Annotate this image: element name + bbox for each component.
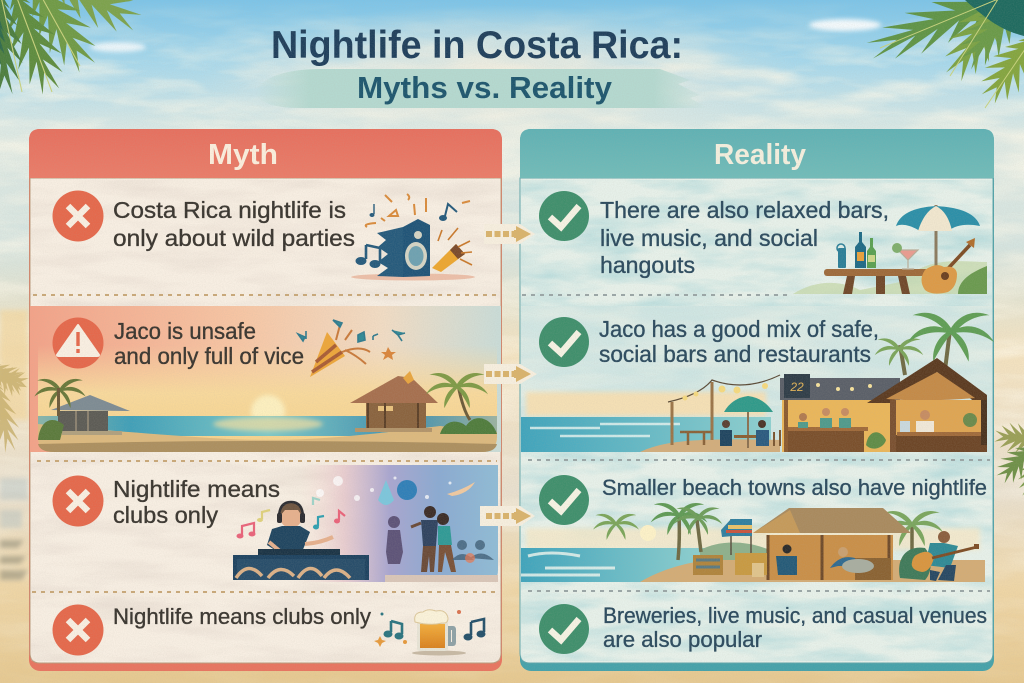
myth header [29, 129, 502, 178]
palm: left edge [0, 354, 33, 455]
text: reality 1: There are also relaxed bars, [600, 197, 889, 223]
icon: warning [52, 318, 104, 368]
hut [693, 508, 911, 580]
myth row 4 [52, 604, 486, 656]
umbrella and diners [680, 396, 780, 448]
palm: top-right [862, 0, 1024, 111]
reality header [520, 129, 994, 178]
text: reality 3: Smaller beach towns also have nightlife [602, 475, 987, 500]
icon: green check [539, 317, 589, 367]
text: reality 2: Jaco has a good mix of safe, [599, 316, 879, 342]
text: myth 4: Nightlife means clubs only [113, 604, 371, 629]
text: reality 4: are also popular [603, 627, 762, 652]
icon: red x [52, 476, 104, 526]
string lights and posts [668, 375, 780, 445]
reality row 4 [539, 603, 987, 654]
icon: speaker and party popper [351, 194, 475, 280]
reality row 1 [539, 191, 987, 294]
reality row 3 [521, 475, 987, 582]
thatched bar [867, 358, 987, 452]
title: Myths vs. Reality [357, 70, 613, 105]
bar building: 22 [789, 380, 804, 394]
text: myth 1: Costa Rica nightlife is [113, 197, 346, 223]
palms [875, 313, 994, 375]
arrow: myth 3 to reality 3 [480, 506, 535, 526]
myth header: Myth [208, 139, 278, 171]
scene: club lights and crowd [300, 465, 498, 582]
text: myth 3: clubs only [113, 502, 219, 528]
icon: beer mug and notes [374, 610, 486, 656]
scene: small beach town bar [521, 503, 985, 582]
guitarist [912, 531, 979, 581]
reality row 2 [521, 306, 994, 452]
icon: bar table, umbrella and guitar [793, 205, 987, 294]
text: myth 1: only about wild parties [113, 225, 355, 251]
text: myth 1 [113, 197, 355, 251]
icon: red x [52, 190, 104, 242]
palms [593, 503, 943, 560]
right hut [350, 371, 438, 432]
flag [721, 519, 752, 555]
palm: top-left [0, 0, 148, 99]
scene: beach at sunset [30, 306, 501, 452]
scene: beach bar and restaurant [521, 306, 994, 452]
text: myth 2 [114, 318, 304, 369]
myth row 1 [52, 190, 475, 280]
text: myth 3 [113, 476, 280, 528]
text: reality 1: hangouts [600, 252, 695, 278]
icon: red x [52, 604, 104, 656]
myth row 3 [52, 465, 498, 582]
icon: green check [539, 475, 589, 525]
title [255, 24, 708, 108]
reality header: Reality [714, 139, 806, 171]
arrow: myth 2 to reality 2 [484, 364, 537, 384]
text: reality 1 [600, 197, 889, 278]
dancers [386, 516, 403, 564]
icon: dj and decks [233, 498, 369, 580]
text: reality 1: live music, and social [600, 225, 818, 251]
text: myth 2: and only full of vice [114, 343, 304, 369]
text: reality 2 [599, 316, 879, 367]
palm: right edge [990, 421, 1024, 500]
text: reality 4: Breweries, live music, and casual venues [603, 603, 987, 628]
myth row 2 [30, 306, 501, 452]
left hut [51, 395, 130, 435]
text: myth 3: Nightlife means [113, 476, 280, 502]
panel: myth [29, 129, 502, 671]
bar building [780, 374, 900, 452]
panel: reality [520, 129, 994, 671]
icon: party popper [298, 320, 405, 377]
title: Nightlife in Costa Rica: [271, 24, 683, 67]
icon: green check [539, 604, 589, 654]
text: reality 2: social bars and restaurants [599, 341, 871, 367]
subtitle band [255, 69, 708, 108]
arrow: myth 1 to reality 1 [484, 224, 535, 244]
icon: green check [539, 191, 589, 241]
text: reality 4 [603, 603, 987, 652]
text: myth 2: Jaco is unsafe [114, 318, 256, 344]
